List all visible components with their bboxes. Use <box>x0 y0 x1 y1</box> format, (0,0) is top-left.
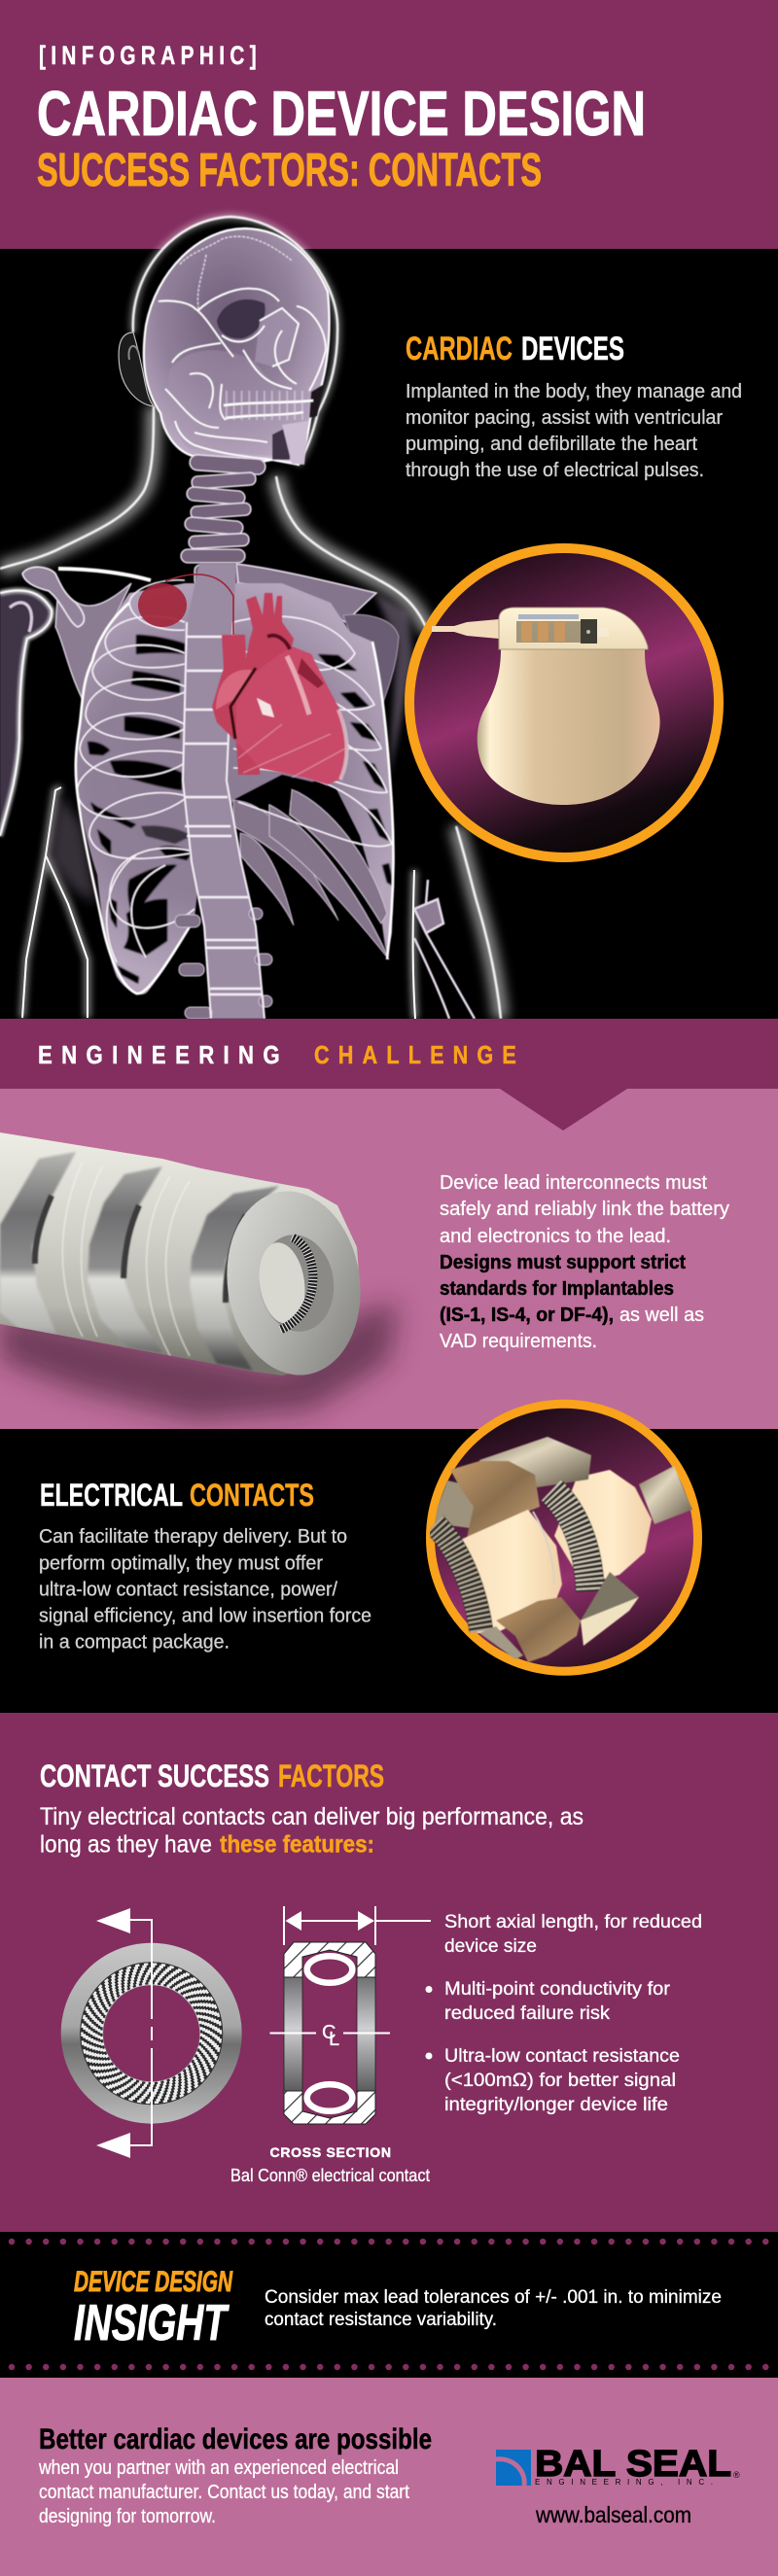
feature list <box>426 1912 702 2115</box>
panel: device design insight: DEVICE DESIGN <box>74 2266 233 2298</box>
text: contact success factors: CONTACT SUCCESS <box>40 1758 269 1793</box>
heart <box>212 593 348 784</box>
text: engineering challenge body <box>440 1172 729 1352</box>
text: engineering challenge body: standards for Implantables <box>440 1278 674 1300</box>
logo: Bal Seal Engineering <box>496 2444 740 2527</box>
text: electrical contacts <box>39 1478 371 1653</box>
shoulder and collar bones <box>0 564 475 1019</box>
dimension arrows <box>284 1906 431 1945</box>
footer call to action <box>38 2423 432 2527</box>
panel: device design insight: INSIGHT <box>74 2295 230 2351</box>
text: electrical contacts: ultra-low contact resistance, power/ <box>39 1579 337 1600</box>
feature list: Ultra-low contact resistance <box>444 2046 680 2067</box>
feature list: reduced failure risk <box>444 2003 611 2024</box>
text: cardiac devices: through the use of electrical pulses. <box>406 460 704 481</box>
header title block: SUCCESS FACTORS: CONTACTS <box>37 145 542 196</box>
rib cage <box>76 580 394 1019</box>
logo: Bal Seal Engineering: www.balseal.com <box>535 2502 691 2527</box>
text: engineering challenge body: and electronics to the lead. <box>440 1226 671 1247</box>
text: electrical contacts: Can facilitate therapy delivery. But to <box>39 1526 347 1548</box>
image: lead interconnect cylinder <box>0 1118 399 1419</box>
footer call to action: contact manufacturer. Contact us today, and start <box>39 2482 409 2503</box>
feature list: integrity/longer device life <box>444 2095 668 2115</box>
header title block: [INFOGRAPHIC] <box>39 41 262 70</box>
text: contact success factors <box>40 1758 584 1859</box>
logo: Bal Seal Engineering: ® <box>733 2470 740 2480</box>
feature list: device size <box>444 1936 537 1957</box>
feature list: (<100mΩ) for better signal <box>444 2071 676 2091</box>
section line with arrows <box>96 1908 152 2158</box>
text: cardiac devices: Implanted in the body, they manage and <box>406 381 742 402</box>
text: contact success factors: Tiny electrical contacts can deliver big performance, as <box>40 1803 584 1830</box>
skull <box>144 228 330 465</box>
feature list: Multi-point conductivity for <box>444 1979 671 2000</box>
text: contact success factors: FACTORS <box>278 1758 384 1793</box>
text: electrical contacts: ELECTRICAL <box>40 1478 183 1513</box>
text: engineering challenge body: Designs must support strict <box>440 1252 686 1273</box>
footer call to action: designing for tomorrow. <box>39 2506 216 2527</box>
text: cardiac devices: pumping, and defibrillate the heart <box>406 434 697 455</box>
header title block <box>37 41 646 196</box>
body silhouette <box>0 217 501 1019</box>
diagram: contact ring front view <box>61 1908 242 2158</box>
text: cardiac devices: DEVICES <box>521 331 624 367</box>
logo: Bal Seal Engineering: BAL SEAL <box>535 2444 731 2485</box>
text: cardiac devices: CARDIAC <box>406 331 513 367</box>
text: engineering challenge body: Device lead interconnects must <box>440 1172 707 1194</box>
text: cross section caption: Bal Conn® electrical contact <box>230 2166 430 2185</box>
callout circle: pacemaker device <box>409 548 719 857</box>
centerline symbol <box>322 2022 339 2050</box>
centerline symbol: C <box>322 2022 336 2043</box>
footer call to action: Better cardiac devices are possible <box>39 2423 432 2455</box>
text: cross section caption: CROSS SECTION <box>270 2144 391 2160</box>
panel: device design insight: contact resistance variability. <box>265 2309 497 2330</box>
diagram: cross section <box>270 1906 431 2124</box>
text: engineering challenge body: (IS-1, IS-4, or DF-4), <box>440 1305 614 1326</box>
text: cardiac devices <box>406 331 742 481</box>
feature list: Short axial length, for reduced <box>444 1912 702 1932</box>
centerline symbol: L <box>329 2029 339 2050</box>
panel: device design insight: Consider max lead tolerances of +/- .001 in. to minimize <box>265 2286 722 2308</box>
text: electrical contacts: signal efficiency, and low insertion force <box>39 1606 371 1627</box>
banner: engineering challenge: CHALLENGE <box>314 1040 525 1069</box>
back ribs <box>233 789 389 959</box>
illustration: translucent human torso with skeleton <box>0 217 501 1019</box>
neck vertebrae <box>181 454 265 586</box>
text: electrical contacts: perform optimally, they must offer <box>39 1553 323 1575</box>
panel: device design insight <box>12 2242 768 2367</box>
banner: engineering challenge: ENGINEERING <box>38 1040 289 1069</box>
spine and sternum <box>175 564 272 1019</box>
callout circle: electrical contact close-up <box>430 1404 698 1671</box>
text: cross section caption <box>230 2144 430 2185</box>
text: electrical contacts: in a compact package. <box>39 1631 230 1653</box>
text: electrical contacts: CONTACTS <box>190 1478 314 1513</box>
text: engineering challenge body: as well as <box>619 1305 704 1326</box>
banner: engineering challenge <box>0 1019 778 1131</box>
text: contact success factors: these features: <box>220 1831 374 1859</box>
icon: logo mark <box>496 2450 531 2486</box>
footer call to action: when you partner with an experienced electrical <box>38 2457 399 2479</box>
text: contact success factors: long as they have <box>40 1831 212 1859</box>
text: engineering challenge body: VAD requirements. <box>440 1331 597 1352</box>
text: cardiac devices: monitor pacing, assist with ventricular <box>406 407 723 429</box>
icon: implanted pacemaker with lead <box>138 574 233 635</box>
text: engineering challenge body: safely and reliably link the battery <box>440 1199 729 1220</box>
logo: Bal Seal Engineering: ENGINEERING, INC. <box>535 2478 713 2487</box>
